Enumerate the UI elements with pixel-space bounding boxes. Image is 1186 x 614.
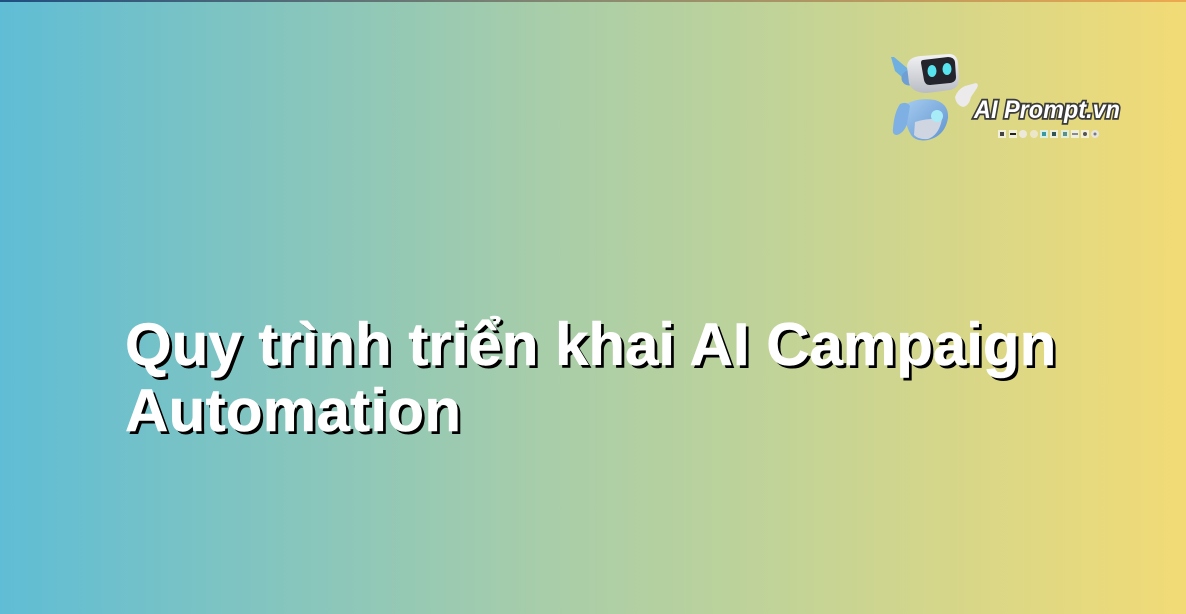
- title: Quy trình triển khai AI Campaign: [125, 311, 1056, 378]
- title: Automation: [125, 377, 461, 444]
- icon: robot mascot: [891, 54, 978, 140]
- logo wordmark: AI Prompt.vn: [973, 96, 1120, 124]
- top accent strip: [0, 0, 1186, 2]
- icon row: [998, 130, 1099, 138]
- title: [125, 311, 1056, 444]
- logo: AI Prompt.vn: [891, 54, 1121, 140]
